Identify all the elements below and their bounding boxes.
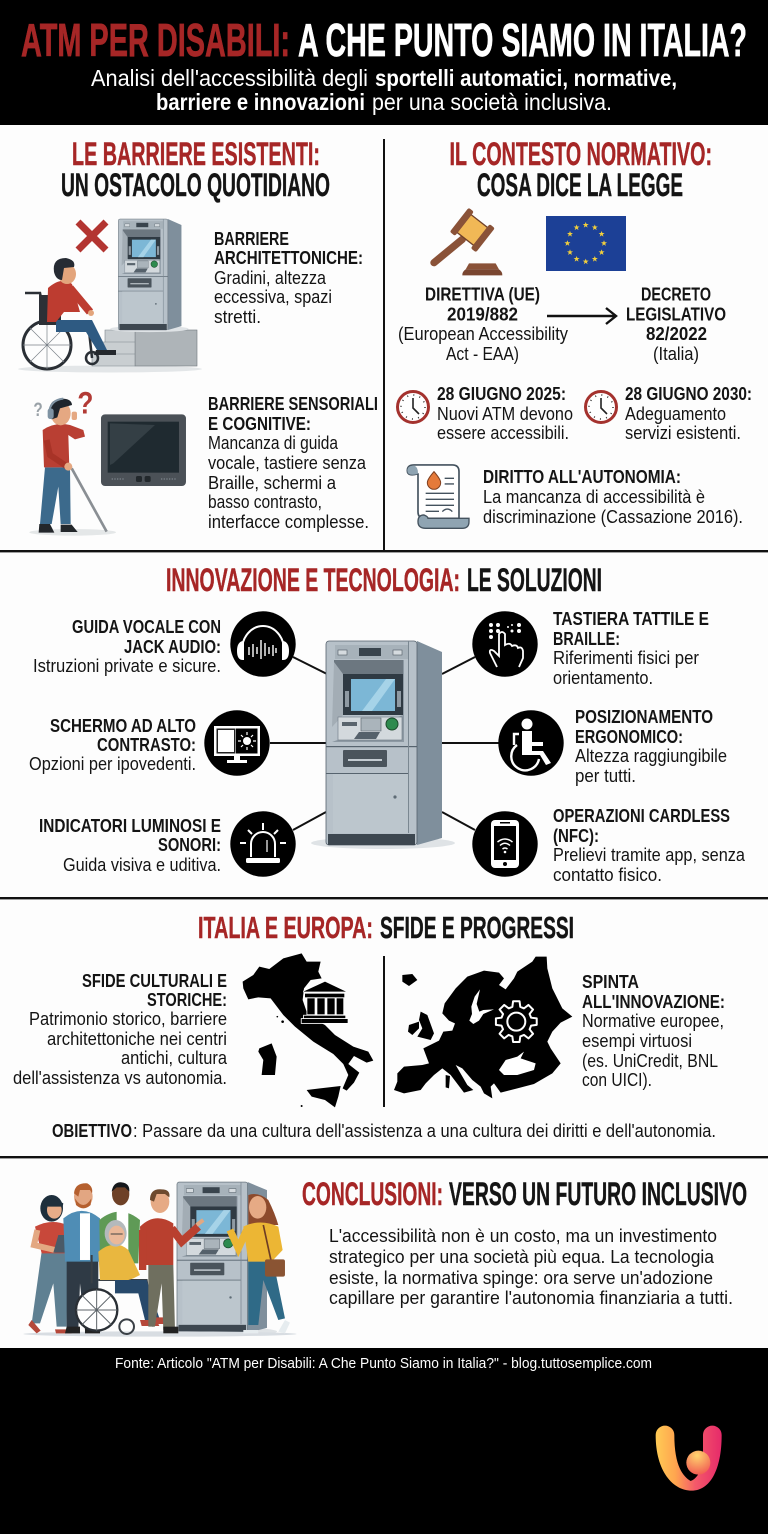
feature: tastiera tattile: orientamento. — [553, 667, 653, 688]
feature: posizionamento ergonomico: ERGONOMICO: — [575, 727, 683, 747]
feature: posizionamento ergonomico: POSIZIONAMENTO — [575, 707, 713, 727]
feature: schermo ad alto contrasto: CONTRASTO: — [97, 735, 196, 755]
text: barriere sensoriali e cognitive: basso contrasto, — [208, 491, 322, 512]
feature: guida vocale — [33, 611, 296, 677]
text: spinta all'innovazione — [582, 972, 725, 1090]
text: barriere sensoriali e cognitive — [208, 394, 378, 532]
illustration: diverse group at accessible ATM — [23, 1182, 297, 1337]
icon: beacon — [230, 811, 296, 877]
feature: operazioni cardless — [472, 806, 746, 885]
heading: italia e europa: ITALIA E EUROPA: — [198, 910, 373, 945]
text: sfide culturali: antichi, cultura — [121, 1047, 228, 1068]
text: barriere architettoniche — [214, 229, 363, 327]
feature: guida vocale: GUIDA VOCALE CON — [72, 617, 221, 637]
text: barriere sensoriali e cognitive: vocale, tastiere senza — [208, 452, 367, 473]
feature: operazioni cardless: contatto fisico. — [553, 864, 662, 885]
subtitle: sportelli automatici, normative, — [375, 65, 677, 91]
illustration: central ATM — [311, 641, 455, 849]
logo — [656, 1426, 722, 1491]
page background — [0, 125, 768, 1348]
man with beard and jacket — [63, 1183, 100, 1333]
feature: schermo ad alto contrasto — [29, 710, 270, 776]
feature: posizionamento ergonomico — [498, 707, 727, 786]
icon: legal scroll — [407, 465, 469, 528]
feature: tastiera tattile: TASTIERA TATTILE E — [553, 609, 709, 629]
text: barriere sensoriali e cognitive: BARRIERE SENSORIALI — [208, 394, 378, 414]
map: Europe with gear icon — [394, 957, 572, 1098]
text: barriere architettoniche: BARRIERE — [214, 229, 289, 249]
text: spinta all'innovazione: esempi virtuosi — [582, 1030, 692, 1051]
icon: clock 2025 — [398, 392, 428, 422]
text: barriere sensoriali e cognitive: interfacce complesse. — [208, 511, 369, 532]
text: 28 giugno 2030 — [625, 384, 752, 443]
icon: monitor — [204, 710, 270, 776]
feature: indicatori luminosi — [39, 811, 296, 877]
feature: tastiera tattile: BRAILLE: — [553, 629, 620, 649]
feature: indicatori luminosi: Guida visiva e uditiva. — [63, 854, 221, 875]
arrow — [547, 308, 616, 324]
icon: wheelchair — [498, 710, 564, 776]
text: sfide culturali: STORICHE: — [147, 990, 227, 1010]
text: sfide culturali: Patrimonio storico, barriere — [29, 1008, 227, 1029]
icon: headphones — [230, 611, 296, 677]
text: decreto legislativo — [626, 284, 726, 364]
panel: innovazione e tecnologia — [29, 562, 746, 885]
text: conclusioni — [329, 1225, 733, 1308]
feature: tastiera tattile: Riferimenti fisici per — [553, 647, 699, 668]
feature: guida vocale: JACK AUDIO: — [124, 637, 221, 657]
header panel — [0, 0, 768, 125]
feature: schermo ad alto contrasto: Opzioni per ipovedenti. — [29, 753, 196, 774]
text: 28 giugno 2025: essere accessibili. — [437, 422, 569, 443]
title: ATM PER DISABILI: — [21, 14, 290, 66]
illustration: blind person with cane and dark screen — [29, 384, 186, 536]
text: barriere architettoniche: stretti. — [214, 306, 261, 327]
subtitle: barriere e innovazioni — [156, 89, 365, 115]
text: barriere sensoriali e cognitive: E COGNITIVE: — [208, 414, 311, 434]
heading: innovazione: LE SOLUZIONI — [467, 562, 602, 598]
panel: italia e europa — [13, 910, 725, 1141]
text: 28 giugno 2025: Nuovi ATM devono — [437, 403, 573, 424]
source text: Fonte: Articolo "ATM per Disabili: A Che Punto Siamo in Italia?" - blog.tuttosemplice.com — [115, 1355, 652, 1372]
text: obiettivo: OBIETTIVO — [52, 1121, 132, 1141]
text: diritto all'autonomia — [483, 467, 743, 527]
text: spinta all'innovazione: con UICI). — [582, 1069, 652, 1090]
text: diritto all'autonomia: La mancanza di accessibilità è — [483, 486, 705, 507]
text: spinta all'innovazione: Normative europee, — [582, 1010, 724, 1031]
text: diritto all'autonomia: discriminazione (Cassazione 2016). — [483, 506, 743, 527]
feature: indicatori luminosi: INDICATORI LUMINOSI E — [39, 816, 221, 836]
text: spinta all'innovazione: ALL'INNOVAZIONE: — [582, 992, 725, 1012]
heading: barriere: LE BARRIERE ESISTENTI: — [72, 136, 320, 172]
text: sfide culturali: dell'assistenza vs autonomia. — [13, 1067, 227, 1088]
text: spinta all'innovazione: SPINTA — [582, 972, 639, 992]
panel: conclusioni — [23, 1176, 747, 1337]
text: direttiva UE: (European Accessibility — [398, 323, 569, 344]
text: diritto all'autonomia: DIRITTO ALL'AUTONOMIA: — [483, 467, 681, 487]
text: decreto legislativo: LEGISLATIVO — [626, 304, 726, 324]
feature: tastiera tattile — [472, 609, 709, 688]
woman with bag — [230, 1194, 290, 1333]
illustration: blind person with cane and dark screen: ? — [33, 400, 43, 421]
panel: barriere esistenti — [18, 136, 378, 536]
feature: indicatori luminosi: SONORI: — [158, 835, 221, 855]
text: conclusioni: strategico per una società più equa. La tecnologia — [329, 1246, 715, 1267]
title — [21, 14, 747, 66]
text: barriere architettoniche: eccessiva, spazi — [214, 286, 332, 307]
text: decreto legislativo: 82/2022 — [646, 324, 707, 344]
feature: posizionamento ergonomico: Altezza raggiungibile — [575, 745, 727, 766]
footer panel — [0, 1348, 768, 1534]
text: 28 giugno 2030: Adeguamento — [625, 403, 726, 424]
text: 28 giugno 2030: servizi esistenti. — [625, 422, 741, 443]
woman with tablet — [28, 1195, 76, 1333]
feature: operazioni cardless: Prelievi tramite app, senza — [553, 844, 746, 865]
text: barriere architettoniche: ARCHITETTONICHE: — [214, 248, 363, 268]
icon: braille hand — [472, 611, 538, 677]
feature: schermo ad alto contrasto: SCHERMO AD ALTO — [50, 716, 196, 736]
older woman in wheelchair — [76, 1220, 169, 1334]
text: barriere architettoniche: Gradini, altezza — [214, 267, 327, 288]
icon: smartphone NFC — [472, 811, 538, 877]
heading: conclusioni — [302, 1176, 747, 1212]
man in red sweater pointing at ATM — [140, 1189, 203, 1333]
heading: contesto normativo — [450, 136, 712, 203]
illustration: blind person with cane and dark screen: ? — [77, 384, 93, 420]
heading: italia e europa: SFIDE E PROGRESSI — [380, 910, 574, 945]
heading: barriere — [61, 136, 330, 203]
panel: contesto normativo — [398, 136, 752, 528]
map: Italy with monument icon — [243, 953, 373, 1107]
text: 28 giugno 2025 — [437, 384, 573, 443]
text: sfide culturali — [13, 971, 228, 1088]
feature: guida vocale: Istruzioni private e sicure. — [33, 655, 221, 676]
subtitle: per una società inclusiva. — [372, 89, 612, 115]
heading: innovazione: INNOVAZIONE E TECNOLOGIA: — [166, 562, 460, 598]
text: decreto legislativo: DECRETO — [641, 284, 711, 304]
subtitle — [91, 65, 677, 115]
feature: posizionamento ergonomico: per tutti. — [575, 765, 636, 786]
text: direttiva UE: 2019/882 — [447, 304, 518, 324]
heading: conclusioni: CONCLUSIONI: — [302, 1176, 443, 1212]
text: spinta all'innovazione: (es. UniCredit, BNL — [582, 1050, 718, 1071]
text: conclusioni: esiste, la normativa spinge: ora serve un'adozione — [329, 1267, 713, 1288]
heading: barriere: UN OSTACOLO QUOTIDIANO — [61, 167, 330, 203]
text: decreto legislativo: (Italia) — [653, 343, 699, 364]
text: barriere sensoriali e cognitive: Braille, schermi a — [208, 472, 337, 493]
man in green jacket — [99, 1182, 140, 1263]
text: 28 giugno 2025: 28 GIUGNO 2025: — [437, 384, 566, 404]
text: direttiva UE: Act - EAA) — [446, 343, 519, 364]
text: direttiva UE — [398, 284, 569, 364]
icon: EU flag — [546, 216, 626, 271]
text: sfide culturali: SFIDE CULTURALI E — [82, 971, 227, 991]
text: direttiva UE: DIRETTIVA (UE) — [425, 284, 540, 304]
subtitle: Analisi dell'accessibilità degli — [91, 65, 368, 91]
text: conclusioni: capillare per garantire l'autonomia finanziaria a tutti. — [329, 1287, 733, 1308]
illustration: wheelchair user at ATM on steps — [18, 219, 202, 372]
text: barriere sensoriali e cognitive: Mancanza di guida — [208, 432, 339, 453]
feature: operazioni cardless: (NFC): — [553, 826, 599, 846]
text: conclusioni: L'accessibilità non è un costo, ma un investimento — [329, 1225, 717, 1246]
icon: clock 2030 — [586, 392, 616, 422]
text: sfide culturali: architettoniche nei centri — [47, 1028, 227, 1049]
feature: operazioni cardless: OPERAZIONI CARDLESS — [553, 806, 730, 826]
icon: gavel — [434, 208, 502, 275]
